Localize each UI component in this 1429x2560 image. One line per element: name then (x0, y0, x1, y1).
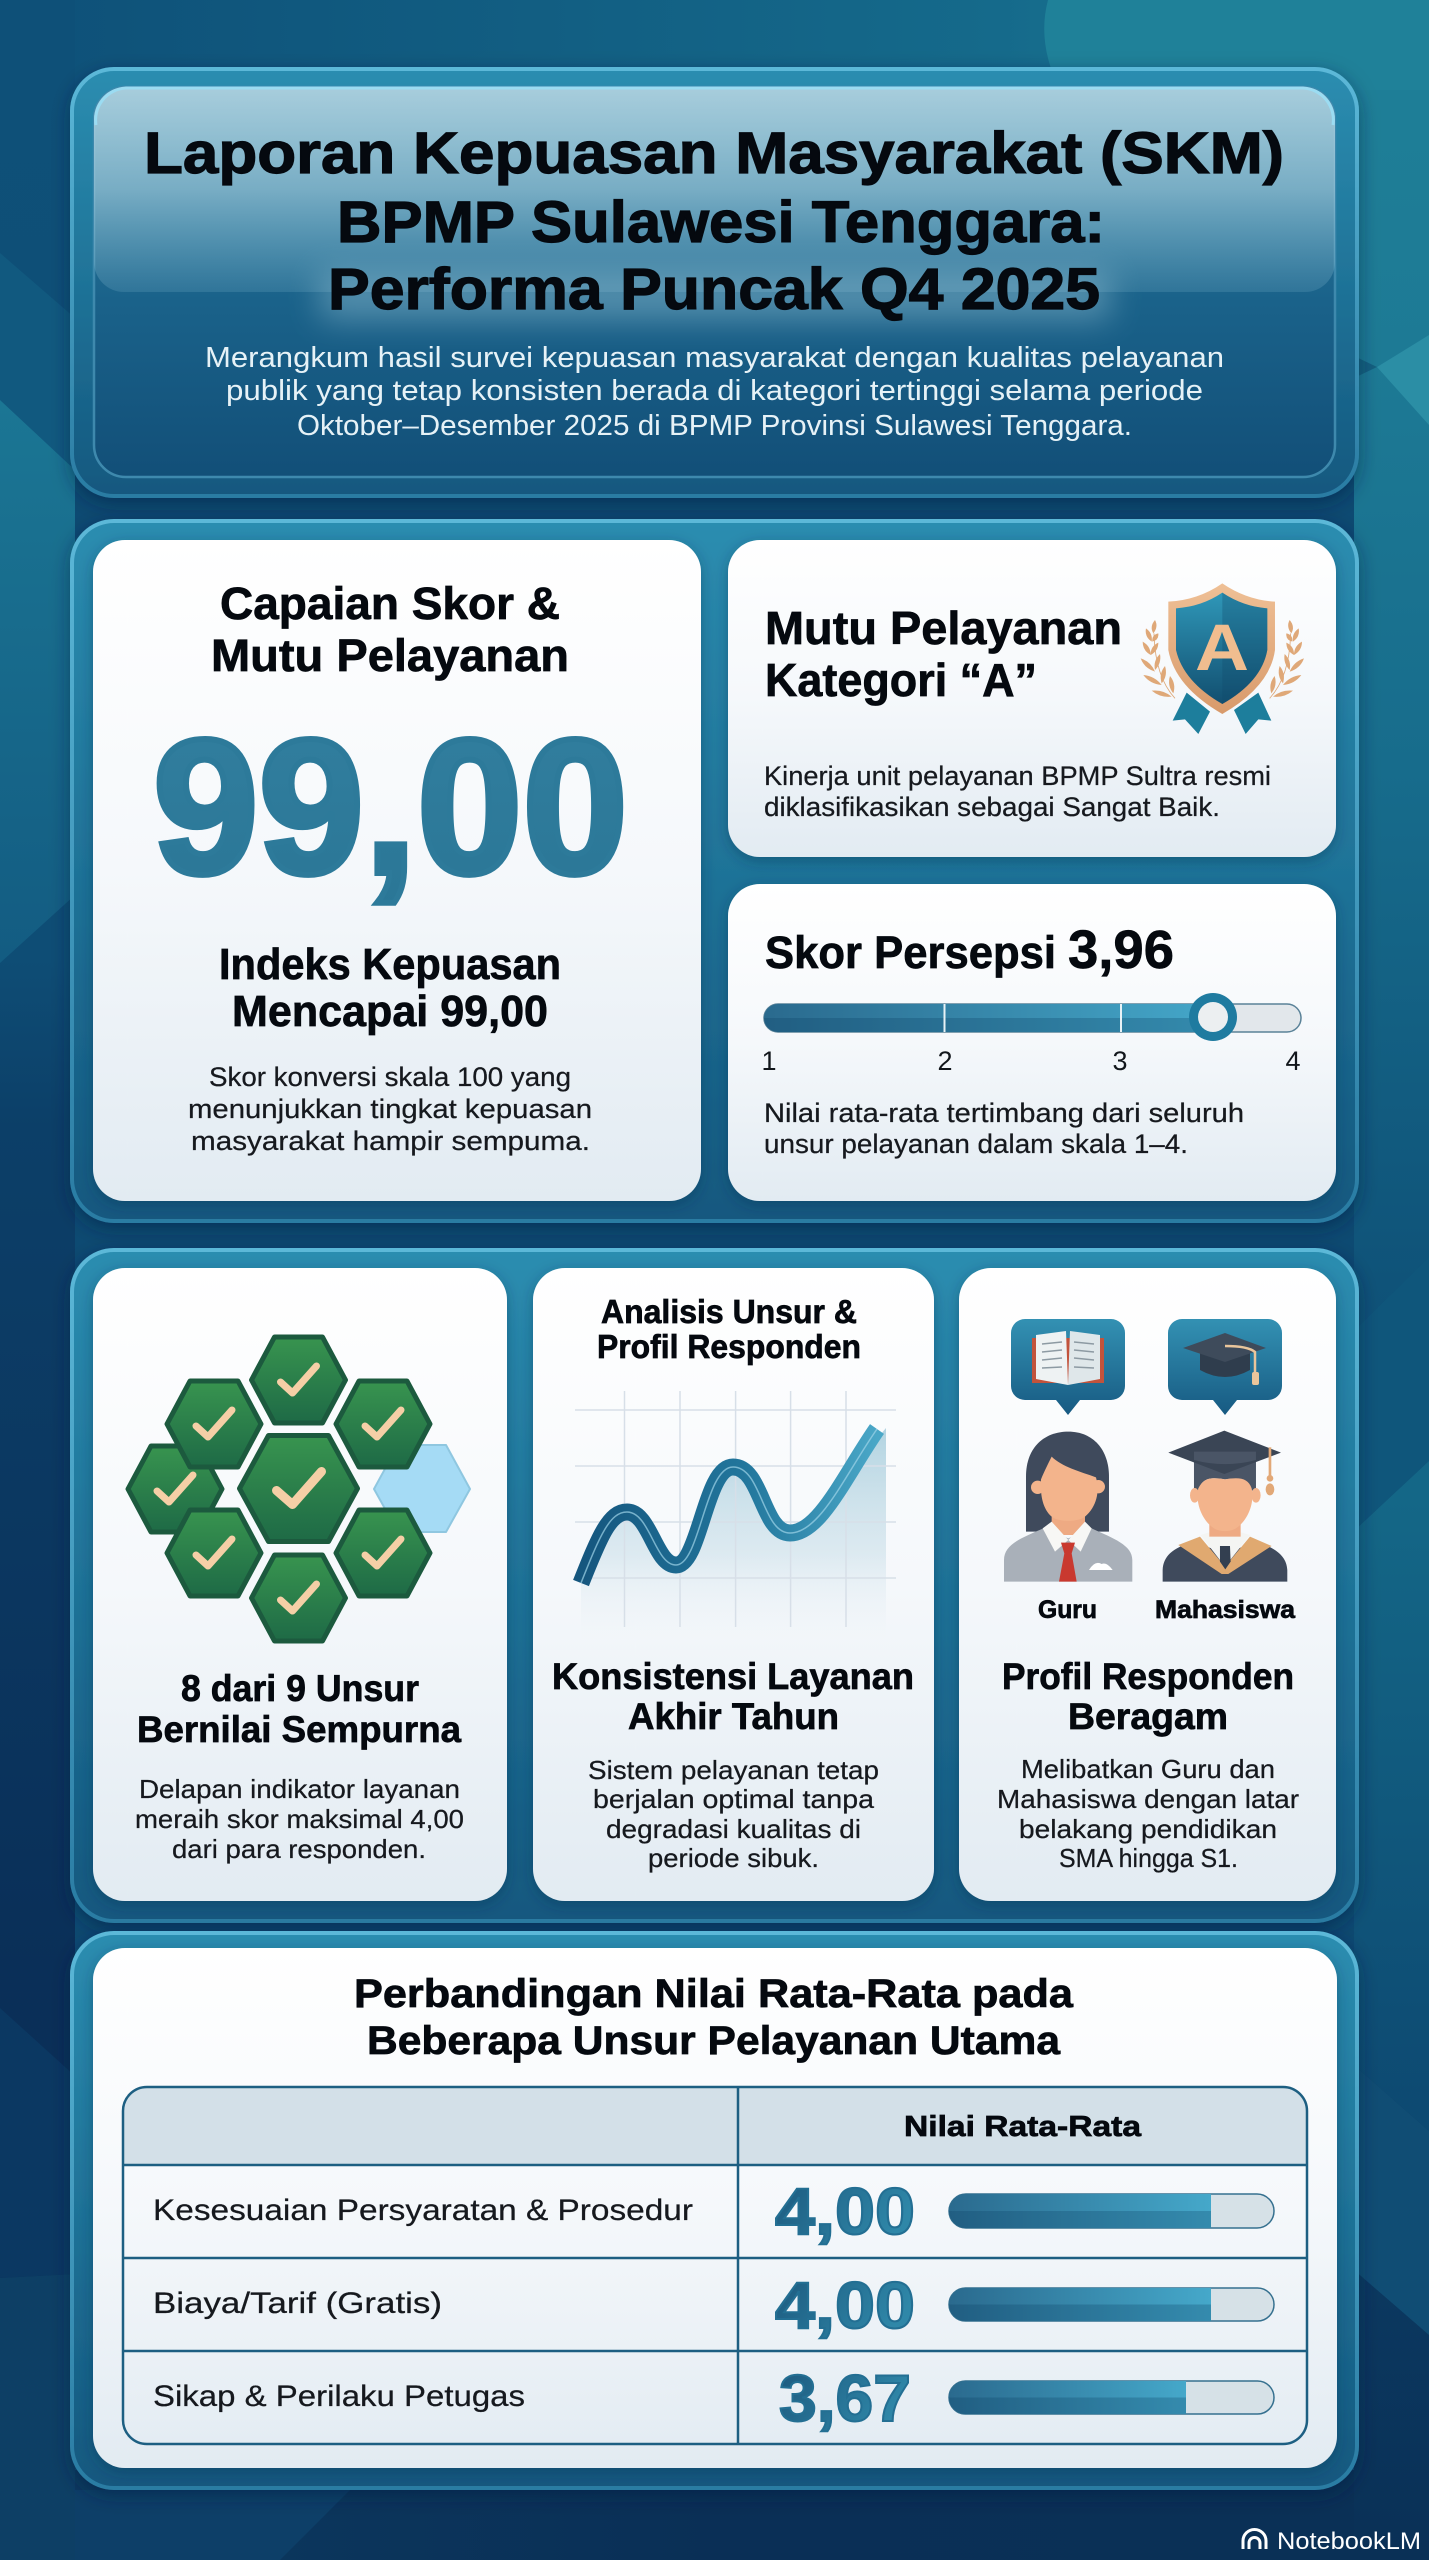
card heading: 8 dari 9 Unsur (181, 1668, 419, 1709)
description: periode sibuk. (648, 1843, 819, 1873)
panel: header (72, 69, 1357, 496)
subheading (219, 940, 561, 1036)
icon: shield badge A: A (1195, 610, 1249, 684)
card heading (211, 578, 569, 681)
subtitle: Oktober–Desember 2025 di BPMP Provinsi Sulawesi Tenggara. (297, 410, 1132, 442)
icon labels: Guru (1038, 1596, 1097, 1624)
card: skor persepsi (728, 884, 1336, 1201)
header outer frame (72, 69, 1357, 496)
card subheading: Profil Responden (1002, 1656, 1294, 1697)
subheading: Mencapai 99,00 (232, 987, 548, 1036)
description (588, 1755, 879, 1873)
slider scale 1-4: 2 (937, 1046, 953, 1076)
subtitle (205, 342, 1224, 442)
card heading (597, 1293, 861, 1365)
panel frame (72, 1250, 1357, 1921)
card heading (765, 920, 1174, 980)
title: BPMP Sulawesi Tenggara: (337, 190, 1105, 255)
row: sikap perilaku (153, 2361, 1274, 2435)
panel frame (72, 521, 1357, 1221)
card heading: Analisis Unsur & (601, 1293, 857, 1330)
description: dari para responden. (172, 1834, 426, 1864)
card heading: Mutu Pelayanan (765, 602, 1122, 654)
row: sikap perilaku: Sikap & Perilaku Petugas (153, 2380, 525, 2413)
watermark: NotebookLM: NotebookLM (1277, 2528, 1421, 2555)
description: Nilai rata-rata tertimbang dari seluruh (764, 1098, 1244, 1128)
card: mutu pelayanan kategori A (728, 540, 1336, 857)
card heading: Bernilai Sempurna (137, 1709, 461, 1750)
card subheading (552, 1656, 914, 1737)
card heading: 3,96 (1068, 920, 1174, 980)
subtitle: publik yang tetap konsisten berada di kategori tertinggi selama periode (226, 375, 1203, 407)
card subheading: Beragam (1068, 1696, 1228, 1737)
title: Laporan Kepuasan Masyarakat (SKM) (144, 121, 1284, 186)
table heading: Beberapa Unsur Pelayanan Utama (367, 2019, 1061, 2063)
icon: teacher figure (1004, 1432, 1132, 1582)
title (144, 121, 1284, 322)
description (997, 1754, 1299, 1873)
row: kesesuaian persyaratan: 4,00 (775, 2174, 915, 2248)
panel frame (72, 1933, 1357, 2488)
table heading: Perbandingan Nilai Rata-Rata pada (354, 1972, 1074, 2016)
description: Kinerja unit pelayanan BPMP Sultra resmi (764, 761, 1271, 791)
icon: shield badge A (1141, 583, 1304, 734)
slider scale 1-4: 4 (1285, 1046, 1301, 1076)
icon: hexagon cluster with checks (128, 1337, 470, 1641)
line chart (575, 1391, 896, 1640)
description: Mahasiswa dengan latar (997, 1784, 1299, 1814)
icon labels (1038, 1596, 1296, 1624)
description (188, 1062, 592, 1156)
description: unsur pelayanan dalam skala 1–4. (764, 1129, 1188, 1159)
card heading (765, 602, 1122, 706)
row: biaya tarif: 4,00 (775, 2268, 915, 2342)
table card (93, 1948, 1337, 2468)
row: sikap perilaku: 3,67 (779, 2361, 911, 2435)
card heading: Skor Persepsi (765, 927, 1056, 978)
icon: student figure (1163, 1431, 1287, 1582)
slider scale 1-4 (761, 993, 1301, 1076)
card: konsistensi layanan (533, 1268, 934, 1901)
card: profil responden (959, 1268, 1336, 1901)
description (764, 1098, 1244, 1159)
card heading: Profil Responden (597, 1328, 861, 1365)
row: kesesuaian persyaratan: Kesesuaian Persyaratan & Prosedur (153, 2194, 693, 2227)
column header: Nilai Rata-Rata (904, 2111, 1142, 2143)
card subheading: Konsistensi Layanan (552, 1656, 914, 1697)
description: masyarakat hampir sempuma. (191, 1126, 590, 1156)
row: biaya tarif: Biaya/Tarif (Gratis) (153, 2287, 442, 2320)
description: menunjukkan tingkat kepuasan (188, 1094, 592, 1124)
card: skor 99,00 (93, 540, 701, 1201)
description: degradasi kualitas di (606, 1814, 861, 1844)
card subheading: Akhir Tahun (628, 1696, 839, 1737)
table heading (354, 1972, 1074, 2063)
description (764, 761, 1271, 822)
header inner plate (94, 87, 1335, 477)
big number: 99,00 (153, 699, 628, 914)
card heading (137, 1668, 461, 1750)
slider scale 1-4: 3 (1112, 1046, 1128, 1076)
description: Skor konversi skala 100 yang (209, 1062, 571, 1092)
description: Melibatkan Guru dan (1021, 1754, 1275, 1784)
card heading: Capaian Skor & (220, 578, 560, 629)
description (135, 1774, 464, 1864)
description: meraih skor maksimal 4,00 (135, 1804, 464, 1834)
panel: capaian skor dan mutu (72, 521, 1357, 1221)
slider scale 1-4: 1 (761, 1046, 777, 1076)
description: Delapan indikator layanan (139, 1774, 460, 1804)
icon labels: Mahasiswa (1155, 1596, 1296, 1624)
panel: perbandingan nilai rata-rata (72, 1933, 1357, 2488)
description: SMA hingga S1. (1059, 1843, 1238, 1873)
subheading: Indeks Kepuasan (219, 940, 561, 989)
description: diklasifikasikan sebagai Sangat Baik. (764, 792, 1220, 822)
card subheading (1002, 1656, 1294, 1737)
row: kesesuaian persyaratan (153, 2174, 1274, 2248)
description: Sistem pelayanan tetap (588, 1755, 879, 1785)
row: biaya tarif (153, 2268, 1274, 2342)
title: Performa Puncak Q4 2025 (328, 257, 1100, 322)
description: belakang pendidikan (1019, 1814, 1277, 1844)
card: 8 dari 9 unsur (93, 1268, 507, 1901)
card heading: Kategori “A” (765, 654, 1037, 706)
description: berjalan optimal tanpa (593, 1784, 875, 1814)
panel: analisis unsur (72, 1250, 1357, 1921)
comparison table (123, 2087, 1307, 2444)
icon: graduation cap speech bubble (1168, 1319, 1282, 1415)
icon: book speech bubble (1011, 1319, 1125, 1415)
card heading: Mutu Pelayanan (211, 630, 569, 681)
subtitle: Merangkum hasil survei kepuasan masyarakat dengan kualitas pelayanan (205, 342, 1224, 374)
